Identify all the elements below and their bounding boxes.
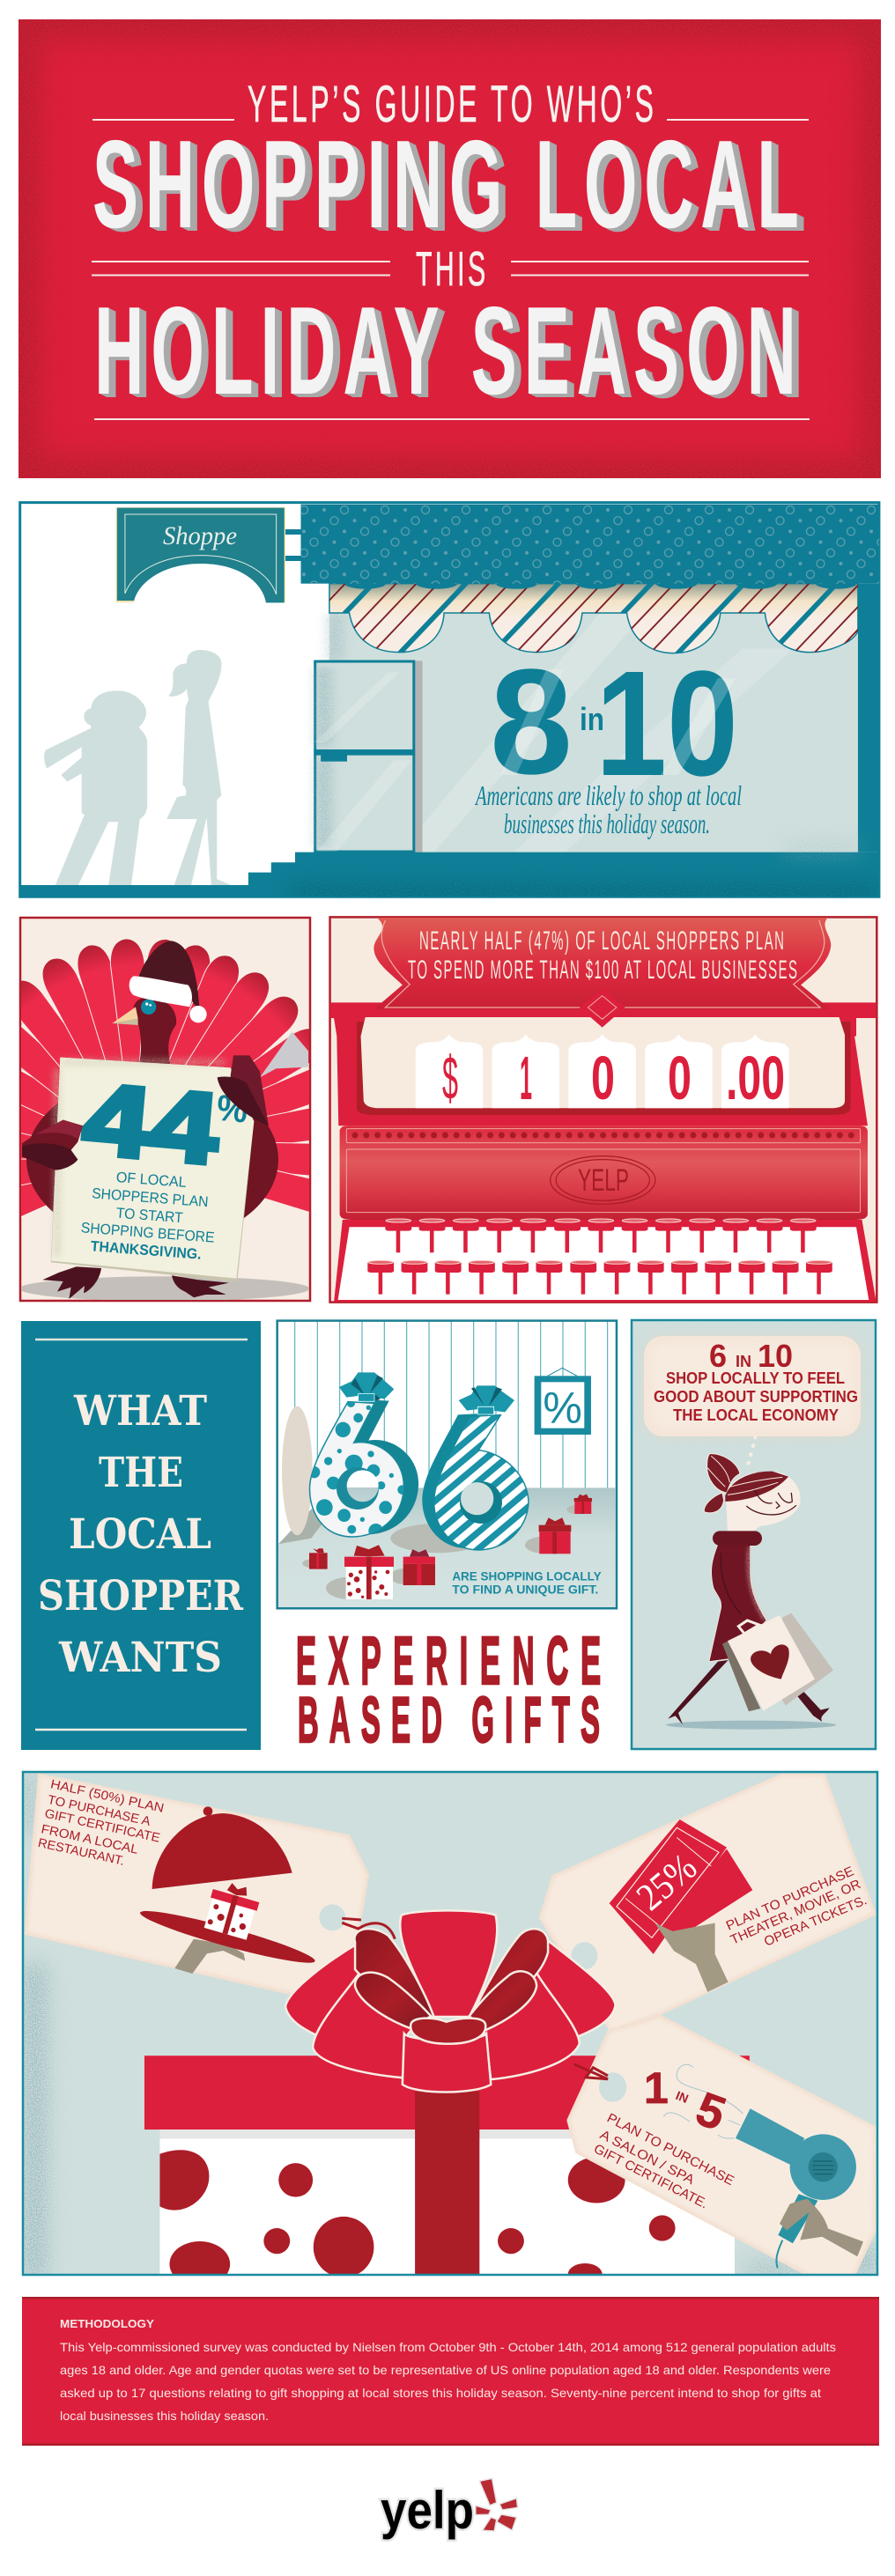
panel: methodology bbox=[22, 2297, 879, 2446]
back shopping bag bbox=[781, 1613, 833, 1706]
gift box body bbox=[159, 2129, 735, 2287]
tag hole bbox=[319, 1904, 345, 1930]
polka dot gift bbox=[344, 1545, 394, 1599]
numeral 6 striped bbox=[422, 1413, 529, 1550]
sign board bbox=[51, 1058, 254, 1282]
panel border bbox=[277, 1321, 617, 1608]
far gift bbox=[574, 1495, 592, 1514]
turkey beak bbox=[112, 1007, 138, 1025]
stat: 8 in 10 bbox=[490, 638, 738, 808]
register top frame bbox=[330, 1002, 877, 1126]
silhouette: shopper two bbox=[166, 650, 231, 885]
banner text: NEARLY HALF (47%) OF LOCAL SHOPPERS PLAN bbox=[419, 927, 784, 956]
small gift bbox=[309, 1548, 328, 1569]
cloche dome bbox=[152, 1806, 292, 1889]
percent frame: % bbox=[543, 1383, 582, 1432]
turkey left wing bbox=[22, 1120, 83, 1170]
turkey right wing bbox=[218, 1055, 269, 1126]
floor shadows bbox=[302, 1505, 590, 1599]
panel: storefront 8 in 10 bbox=[20, 503, 879, 898]
icon: hanging shoppe sign bbox=[116, 507, 300, 602]
panel: 6 in 10 shopper bbox=[632, 1320, 876, 1749]
caption: plan to start before Thanksgiving: SHOPPERS PLAN bbox=[92, 1185, 209, 1210]
tag text: salon: PLAN TO PURCHASE bbox=[604, 2110, 736, 2188]
yelp oval badge bbox=[551, 1156, 655, 1204]
thought dots bbox=[746, 1436, 757, 1465]
panel: what the local shopper wants bbox=[21, 1321, 261, 1750]
price digits bbox=[442, 1044, 785, 1112]
heading: experience based gifts bbox=[296, 1622, 601, 1755]
panel: turkey 44% bbox=[19, 916, 312, 1302]
tag text: FROM A LOCAL bbox=[40, 1822, 139, 1857]
hair dryer bbox=[736, 2108, 856, 2268]
santa hat bbox=[129, 941, 207, 1022]
heading: This: THIS bbox=[416, 243, 485, 296]
shopper legs bbox=[668, 1660, 830, 1724]
hair lock bbox=[704, 1493, 724, 1513]
tag text: TO PURCHASE A bbox=[46, 1793, 152, 1829]
caption: plan to start before Thanksgiving: THANKSGIVING. bbox=[90, 1237, 202, 1263]
caption: plan to start before Thanksgiving: SHOPPING BEFORE bbox=[80, 1219, 215, 1246]
register keys row two bbox=[367, 1260, 832, 1295]
heading: experience based gifts: BASED GIFTS bbox=[298, 1684, 600, 1755]
tag: theater tickets bbox=[539, 1774, 877, 2033]
front shopping bag side bbox=[722, 1641, 760, 1711]
back ticket bbox=[669, 1849, 752, 1931]
tag: restaurant gift certificate bbox=[24, 1773, 395, 1997]
tag text: salon: GIFT CERTIFICATE. bbox=[591, 2141, 710, 2211]
caption: plan to start before Thanksgiving: OF LOCAL bbox=[115, 1169, 187, 1191]
turkey head and neck bbox=[133, 997, 176, 1064]
heart on bag bbox=[751, 1644, 789, 1679]
salon stat: 1 in 5: 1 bbox=[644, 2063, 669, 2113]
window corner grain bbox=[784, 845, 859, 853]
yelp badge text: YELP bbox=[578, 1163, 629, 1198]
coat crease bbox=[721, 1553, 742, 1614]
caption: plan to start before Thanksgiving: TO START bbox=[115, 1205, 183, 1226]
panel: what the local shopper wants: WHAT bbox=[73, 1387, 207, 1436]
front shopping bag bbox=[728, 1615, 815, 1711]
shopper shadow bbox=[666, 1721, 836, 1730]
register keys row one bbox=[385, 1219, 817, 1252]
stat: 8 in 10: 10 bbox=[595, 640, 738, 808]
serving tray bbox=[140, 1911, 315, 1963]
shopper coat bbox=[709, 1544, 766, 1662]
salon stat: 1 in 5: 5 bbox=[689, 2082, 732, 2141]
banner text: TO SPEND MORE THAN $100 AT LOCAL BUSINESSES bbox=[408, 956, 797, 985]
panel: what the local shopper wants: THE bbox=[99, 1449, 183, 1497]
hand holding dryer bbox=[780, 2199, 863, 2256]
tag text: HALF (50%) PLAN bbox=[49, 1777, 166, 1816]
corner grain bbox=[23, 1772, 878, 2281]
panel: methodology: This Yelp-commissioned survey was conducted by Nielsen from October 9th - October 14th, 2014 among 512 general population adults bbox=[60, 2340, 836, 2354]
hair bun bbox=[707, 1454, 740, 1493]
register dot strip bbox=[355, 1133, 854, 1138]
sign text: Shoppe bbox=[163, 521, 237, 550]
bow on second 6 bbox=[459, 1385, 514, 1414]
floor shadow bbox=[19, 1276, 310, 1301]
ribbon bbox=[415, 2092, 479, 2281]
speech bubble: 6 bbox=[709, 1338, 727, 1374]
register banner bbox=[374, 918, 831, 1009]
shop wall and window bbox=[329, 584, 879, 853]
bow on first 6 bbox=[339, 1372, 394, 1401]
tag: salon gift certificate bbox=[566, 2015, 877, 2277]
heading: Shopping Local: SHOPPING LOCAL bbox=[92, 114, 799, 255]
shop door bbox=[314, 661, 423, 853]
price digits: $ bbox=[442, 1044, 458, 1112]
price digits: 0 bbox=[668, 1044, 692, 1112]
turkey eye bbox=[141, 1000, 156, 1015]
air swirls bbox=[663, 2064, 743, 2138]
striped scalloped awning bbox=[329, 584, 858, 653]
speech bubble: IN bbox=[736, 1353, 751, 1370]
caption: Americans likely to shop local: Americans are likely to shop at local bbox=[475, 779, 742, 811]
turkey tail feathers bbox=[21, 939, 309, 1217]
hair bands bbox=[725, 1472, 788, 1502]
register number window bbox=[357, 1017, 851, 1115]
scarf bbox=[713, 1531, 762, 1546]
speech bubble: 10 bbox=[758, 1338, 793, 1374]
caption: plan to start before Thanksgiving bbox=[80, 1169, 215, 1263]
front ticket bbox=[610, 1819, 727, 1954]
store floor bbox=[278, 1487, 615, 1607]
keyboard bbox=[334, 1220, 877, 1302]
panel: experience gifts bbox=[23, 1772, 878, 2287]
price tabs bbox=[416, 1034, 789, 1108]
teal stepped pavement bbox=[20, 853, 879, 897]
tag text bbox=[36, 1777, 166, 1869]
ticket stat: 25%: 25% bbox=[628, 1845, 705, 1919]
price digits: 0 bbox=[591, 1044, 615, 1112]
register body bbox=[340, 1126, 868, 1220]
turkey body bbox=[26, 1103, 278, 1219]
caption: Americans likely to shop local: businesses this holiday season. bbox=[504, 808, 710, 839]
caption: Americans likely to shop local bbox=[475, 779, 742, 839]
tag text: tickets: THEATER, MOVIE, OR bbox=[729, 1877, 863, 1948]
gift bow bbox=[285, 1910, 616, 2093]
turkey feet bbox=[42, 1266, 229, 1299]
gift box lid bbox=[144, 2056, 750, 2129]
closed eyes and smile bbox=[746, 1490, 796, 1515]
stat: 44 percent bbox=[80, 1083, 247, 1166]
panel: methodology: METHODOLOGY bbox=[60, 2317, 154, 2330]
tag text: salon: A SALON / SPA bbox=[597, 2127, 697, 2188]
pavement grain bbox=[291, 888, 879, 898]
caption: shopping locally for unique gift bbox=[452, 1568, 602, 1597]
hand holding tickets bbox=[655, 1923, 729, 1992]
stat: 8 in 10: 8 bbox=[490, 638, 573, 806]
numeral 6 polka dot bbox=[308, 1399, 418, 1539]
tag text: salon bbox=[591, 2110, 736, 2211]
heading: Yelp's guide to who's: YELP’S GUIDE TO WHO’S bbox=[248, 76, 654, 132]
stat: 8 in 10: in bbox=[580, 701, 604, 737]
bag handle bbox=[738, 1620, 759, 1634]
panel: methodology: asked up to 17 questions relating to gift shopping at local stores this holiday season. Seventy-nine percent intend to shop for gifts at bbox=[60, 2386, 821, 2400]
awning dot pattern bbox=[301, 505, 879, 584]
salon stat: 1 in 5: IN bbox=[674, 2088, 691, 2106]
panel: title banner bbox=[18, 19, 881, 478]
price digits: 1 bbox=[520, 1044, 532, 1112]
tag string bbox=[342, 1918, 395, 1939]
panel: methodology: ages 18 and older. Age and gender quotas were set to be representative of US online population aged 18 and older. Respondents were bbox=[60, 2363, 831, 2377]
speech bubble bbox=[644, 1336, 861, 1436]
tag text: tickets: OPERA TICKETS. bbox=[762, 1893, 869, 1950]
top patterned awning placeholder bbox=[300, 505, 879, 589]
tag text: GIFT CERTIFICATE bbox=[43, 1807, 161, 1846]
panel: what the local shopper wants: LOCAL bbox=[69, 1510, 211, 1559]
caption: shopping locally for unique gift: TO FIND A UNIQUE GIFT. bbox=[452, 1583, 598, 1597]
heading: Holiday Season: HOLIDAY SEASON bbox=[94, 281, 796, 421]
serving arm bbox=[174, 1939, 245, 1974]
stat: 44 percent: 44 bbox=[78, 1063, 223, 1186]
shopper neck and head bbox=[726, 1472, 801, 1535]
large gift on floor bbox=[539, 1517, 571, 1554]
red gift bbox=[403, 1549, 435, 1585]
speech bubble: GOOD ABOUT SUPPORTING bbox=[654, 1388, 858, 1406]
wall stripes bbox=[295, 1321, 608, 1500]
gray wing tip bbox=[260, 1032, 308, 1077]
panel: what the local shopper wants: WANTS bbox=[58, 1634, 222, 1682]
banner text bbox=[408, 927, 797, 985]
tag text: tickets: PLAN TO PURCHASE bbox=[724, 1864, 856, 1934]
small gift on tray bbox=[204, 1883, 259, 1940]
salon stat: 1 in 5 bbox=[644, 2063, 732, 2141]
silhouette: shopper one bbox=[44, 690, 147, 885]
beige mirror bbox=[282, 1406, 313, 1535]
tag string bbox=[574, 2064, 608, 2079]
percent frame bbox=[535, 1368, 591, 1435]
tag text: RESTAURANT. bbox=[36, 1836, 126, 1869]
panel: what the local shopper wants: SHOPPER bbox=[38, 1572, 244, 1620]
speech bubble: THE LOCAL ECONOMY bbox=[673, 1406, 839, 1424]
stat: 44 percent: % bbox=[215, 1087, 249, 1131]
panel: methodology: local businesses this holiday season. bbox=[60, 2409, 269, 2423]
register diamond ornament bbox=[580, 988, 625, 1028]
logo: yelp: yelp bbox=[381, 2481, 474, 2540]
caption: shopping locally for unique gift: ARE SHOPPING LOCALLY bbox=[452, 1568, 602, 1583]
speech bubble: SHOP LOCALLY TO FEEL bbox=[666, 1369, 845, 1387]
price digits: .00 bbox=[726, 1044, 785, 1112]
coat grain bbox=[749, 1547, 765, 1620]
panel: cash register bbox=[330, 917, 877, 1303]
heading: experience based gifts: EXPERIENCE bbox=[296, 1622, 601, 1699]
panel: 66 percent unique gift bbox=[277, 1320, 617, 1609]
